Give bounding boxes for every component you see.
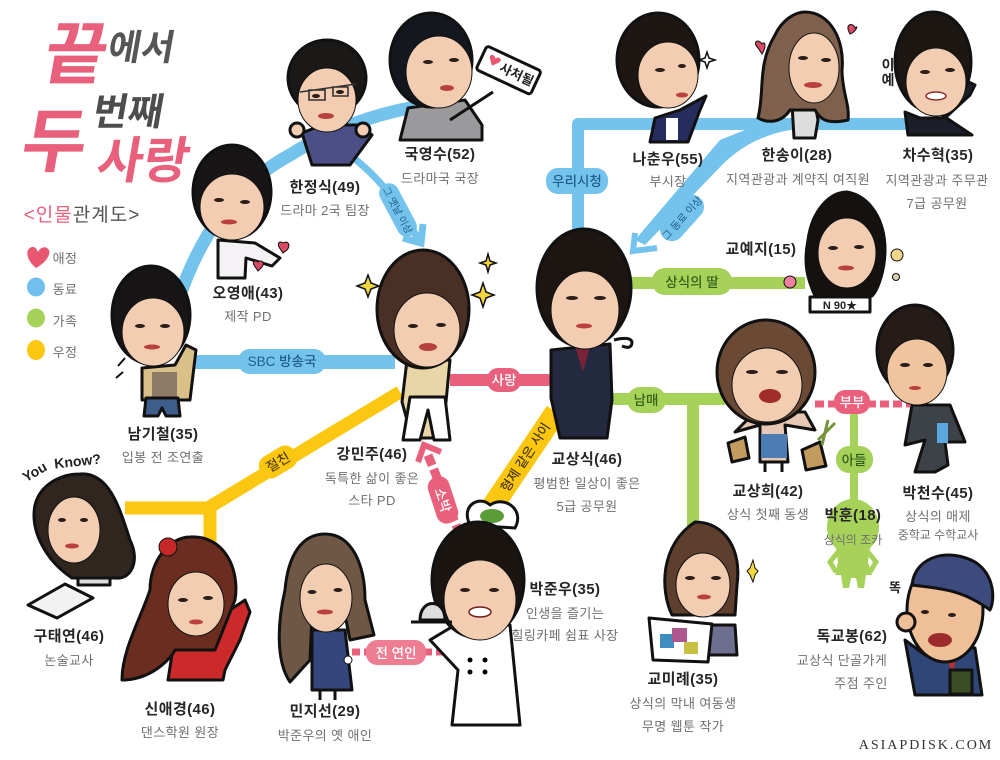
- character: Park Jun-woo: [411, 501, 524, 725]
- icon: sparkle: [699, 52, 715, 68]
- label: ex lover: 전 연인: [375, 646, 417, 661]
- icon: hair flower: [159, 538, 177, 556]
- connection: broadcasting colleagues arc: [180, 107, 415, 295]
- callout: You know: [19, 451, 102, 485]
- icon: hearts: [253, 242, 289, 271]
- name: Na Chun-woo: 나춘우(55): [633, 151, 703, 168]
- silhouette: Park Hun: [827, 499, 879, 588]
- label: SBC: SBC 방송국: [248, 354, 316, 369]
- name: Min Ji-seon: [278, 703, 372, 743]
- icon: flowers: [784, 276, 796, 288]
- name: Na Chun-woo: 부시장: [649, 174, 687, 189]
- name: Han Jeong-sik: 한정식(49): [290, 179, 360, 196]
- label: siblings: 남매: [634, 393, 658, 408]
- title: 끝: [38, 16, 114, 93]
- arrow: Park Jun-woo to Kang Min-ju: [428, 455, 460, 535]
- connection: daughter: [620, 277, 805, 289]
- name: Park Hun: [824, 507, 882, 547]
- connection: ex lover: [352, 648, 445, 656]
- character: Shin Ae-gyeong: [122, 537, 250, 680]
- name: Nam Gi-cheol: 입봉 전 조연출: [122, 450, 204, 465]
- icon: heart affection: [27, 247, 49, 268]
- name: Min Ji-seon: 박준우의 옛 애인: [278, 728, 372, 743]
- character: Park Cheon-su: [877, 305, 965, 472]
- name: Han Song-i: [726, 147, 870, 187]
- character: Dok Go-bong: [889, 555, 993, 695]
- label: love: 사랑: [492, 373, 516, 388]
- connection: siblings: [600, 399, 725, 530]
- label: couple: 부부: [840, 395, 864, 410]
- name: Kang Min-ju: 스타 PD: [348, 493, 396, 508]
- label: Park Jun-woo to Min-ju relation: [425, 474, 461, 526]
- name: Na Chun-woo: [633, 151, 703, 189]
- icon: family dot: [27, 308, 45, 328]
- character: Go Sang-hee: [717, 320, 835, 472]
- title: [14, 16, 215, 189]
- icon: baskets: [728, 437, 826, 470]
- icon: friendship dot: [27, 340, 45, 360]
- name: Park Cheon-su: 중학교 수학교사: [898, 528, 978, 542]
- name: Shin Ae-gyeong: 댄스학원 원장: [141, 725, 219, 740]
- name: Gu Tae-yeon: 구태연(46): [34, 628, 104, 645]
- name: Han Song-i: 한송이(28): [762, 147, 832, 164]
- label: ex lover: [366, 640, 426, 665]
- arrow head: [418, 445, 441, 462]
- name: Cha Su-hyeok: [886, 147, 988, 211]
- label: Sang-sik's daughter: 상식의 딸: [665, 275, 719, 290]
- name: Dok Go-bong: [797, 628, 888, 691]
- legend label colleague: 동료: [53, 282, 77, 297]
- name: Kang Min-ju: [325, 446, 419, 508]
- icon: colleague dot: [27, 278, 45, 296]
- arrow: Han Jeong-sik to Kang Min-ju: [350, 155, 423, 243]
- name: Park Cheon-su: 박천수(45): [903, 485, 973, 502]
- character: Han Jeong-sik: [288, 40, 372, 165]
- name: Go Sang-hee: 교상희(42): [733, 483, 803, 500]
- title: 두: [16, 102, 94, 181]
- character: Go Sang-sik: [537, 229, 632, 438]
- character: Nam Gi-cheol: [112, 266, 196, 416]
- connection: SBC: [185, 355, 395, 369]
- icon: sign: 사처될: [497, 60, 536, 89]
- name: Oh Yeong-ae: 오영애(43): [213, 285, 283, 302]
- label: son: [836, 446, 873, 473]
- character: Min Ji-seon: [279, 534, 374, 700]
- label: more than colleagues (left): 그 옛날 이상: [380, 185, 415, 236]
- name: Kang Min-ju: 강민주(46): [337, 446, 407, 463]
- icon: cloche: [411, 604, 452, 622]
- character: Gu Tae-yeon: [19, 451, 134, 618]
- character: Kang Min-ju: [357, 250, 496, 440]
- character: Go Ye-ji: [784, 192, 903, 312]
- name: Go Sang-sik: [534, 451, 640, 514]
- name: Park Jun-woo: [512, 581, 618, 643]
- name: Gook Yeong-su: 드라마국 국장: [401, 171, 479, 186]
- label: love: [487, 368, 521, 392]
- label: more than colleagues (right): 그 동료 이상: [660, 194, 706, 243]
- name: Gu Tae-yeon: 논술교사: [44, 653, 94, 668]
- name: Go Ye-ji: 교예지(15): [726, 241, 796, 258]
- icon: leek: [818, 420, 835, 445]
- name: Cha Su-hyeok: 지역관광과 주무관: [886, 173, 988, 188]
- name: Go Mi-rye: 무명 웹툰 작가: [642, 719, 724, 734]
- arrow head: [633, 233, 657, 251]
- watermark: ASIAPDISK.COM: [859, 738, 993, 753]
- character: Oh Yeong-ae: [193, 145, 289, 278]
- name: Cha Su-hyeok: 7급 공무원: [906, 196, 968, 211]
- name: Cha Su-hyeok: 차수혁(35): [903, 147, 973, 164]
- legend: [27, 247, 77, 360]
- label: like siblings: 형제 같은 사이: [498, 420, 553, 494]
- label: couple: [834, 390, 870, 414]
- name: Shin Ae-gyeong: 신애경(46): [145, 701, 215, 718]
- label: Park Jun-woo to Min-ju relation: 소박: [432, 486, 453, 514]
- name: Go Sang-sik: 교상식(46): [552, 451, 622, 468]
- name: Gook Yeong-su: 국영수(52): [405, 146, 475, 163]
- icon: paper: [28, 584, 93, 618]
- icon: hearts: [755, 25, 857, 54]
- connection: couple: [815, 400, 910, 408]
- icon: name tag: N 90★: [823, 300, 857, 312]
- connection: close friends: [125, 392, 400, 545]
- arrow: Han Song-i to Go Sang-sik: [635, 130, 790, 245]
- name: Gook Yeong-su: [401, 146, 479, 186]
- name: Park Jun-woo: 박준우(35): [530, 581, 600, 598]
- name: Dok Go-bong: 교상식 단골가게: [797, 653, 887, 668]
- name: Han Jeong-sik: 드라마 2국 팀장: [280, 203, 370, 218]
- character: Han Song-i: [755, 12, 857, 138]
- character: Cha Su-hyeok: [882, 12, 975, 135]
- name: Han Song-i: 지역관광과 계약직 여직원: [726, 172, 870, 187]
- name: Oh Yeong-ae: [213, 285, 283, 324]
- name: Han Jeong-sik: [280, 179, 370, 218]
- title: 에서: [105, 27, 178, 68]
- character: Gook Yeong-su: [390, 13, 541, 140]
- name: Min Ji-seon: 민지선(29): [290, 703, 360, 720]
- name: Go Mi-rye: 교미례(35): [648, 671, 718, 688]
- label: more than colleagues (left): [376, 180, 420, 240]
- legend label friendship: 우정: [53, 345, 77, 360]
- name: Go Mi-rye: [630, 671, 736, 734]
- connection: son: [850, 410, 858, 505]
- name: Park Jun-woo: 인생을 즐기는: [526, 606, 604, 621]
- name: Go Sang-hee: 상식 첫째 동생: [727, 507, 809, 522]
- icon: sign: [476, 46, 541, 95]
- label: our city hall: 우리시청: [552, 174, 602, 189]
- title: 사랑: [93, 132, 195, 189]
- label: our city hall: [546, 168, 608, 194]
- icon: sparkle: [747, 560, 758, 582]
- name: Nam Gi-cheol: 남기철(35): [128, 426, 198, 443]
- callout: exclamation: 예: [882, 72, 894, 88]
- name: Go Sang-hee: [727, 483, 809, 522]
- label: siblings: [627, 387, 666, 413]
- callout: knock: 똑: [889, 580, 901, 595]
- connection: love: [450, 374, 560, 386]
- name: Go Mi-rye: 상식의 막내 여동생: [630, 696, 736, 711]
- callout: You know: You: [19, 458, 50, 485]
- name: Nam Gi-cheol: [122, 426, 204, 465]
- subtitle: <인물관계도>: [24, 204, 140, 226]
- icon: sparkles: [357, 254, 496, 307]
- icon: laptop: [649, 618, 712, 662]
- name: Shin Ae-gyeong: [141, 701, 219, 740]
- callout: You know: Know?: [53, 451, 102, 471]
- name: Gu Tae-yeon: [34, 628, 104, 668]
- name: Park Hun: 박훈(18): [825, 507, 881, 524]
- label: son: 아들: [842, 453, 866, 468]
- name: Park Hun: 상식의 조카: [824, 533, 882, 547]
- legend label affection: 애정: [53, 251, 77, 266]
- name: Oh Yeong-ae: 제작 PD: [224, 309, 272, 324]
- character: Go Mi-rye: [649, 522, 758, 662]
- callout: exclamation: 이: [882, 57, 894, 73]
- name: Dok Go-bong: 독교봉(62): [817, 628, 887, 645]
- name: Park Cheon-su: 상식의 매제: [905, 509, 971, 524]
- label: Sang-sik's daughter: [652, 268, 732, 295]
- name: Kang Min-ju: 독특한 삶이 좋은: [325, 471, 419, 486]
- name: Park Jun-woo: 힐링카페 쉼표 사장: [512, 628, 618, 643]
- connection: like siblings: [490, 412, 556, 510]
- name: Go Sang-sik: 5급 공무원: [556, 499, 618, 514]
- name: Park Cheon-su: [898, 485, 978, 542]
- character: Na Chun-woo: [617, 13, 715, 142]
- name: Dok Go-bong: 주점 주인: [834, 676, 888, 691]
- label: close friends: [255, 441, 301, 483]
- name: Go Sang-sik: 평범한 일상이 좋은: [534, 476, 640, 491]
- legend label family: 가족: [53, 314, 77, 329]
- label: SBC: [238, 349, 326, 374]
- icon: chef hat: [467, 501, 518, 528]
- connection: city hall: [578, 124, 915, 245]
- label: close friends: 절친: [264, 450, 293, 475]
- title: 번째: [89, 91, 167, 134]
